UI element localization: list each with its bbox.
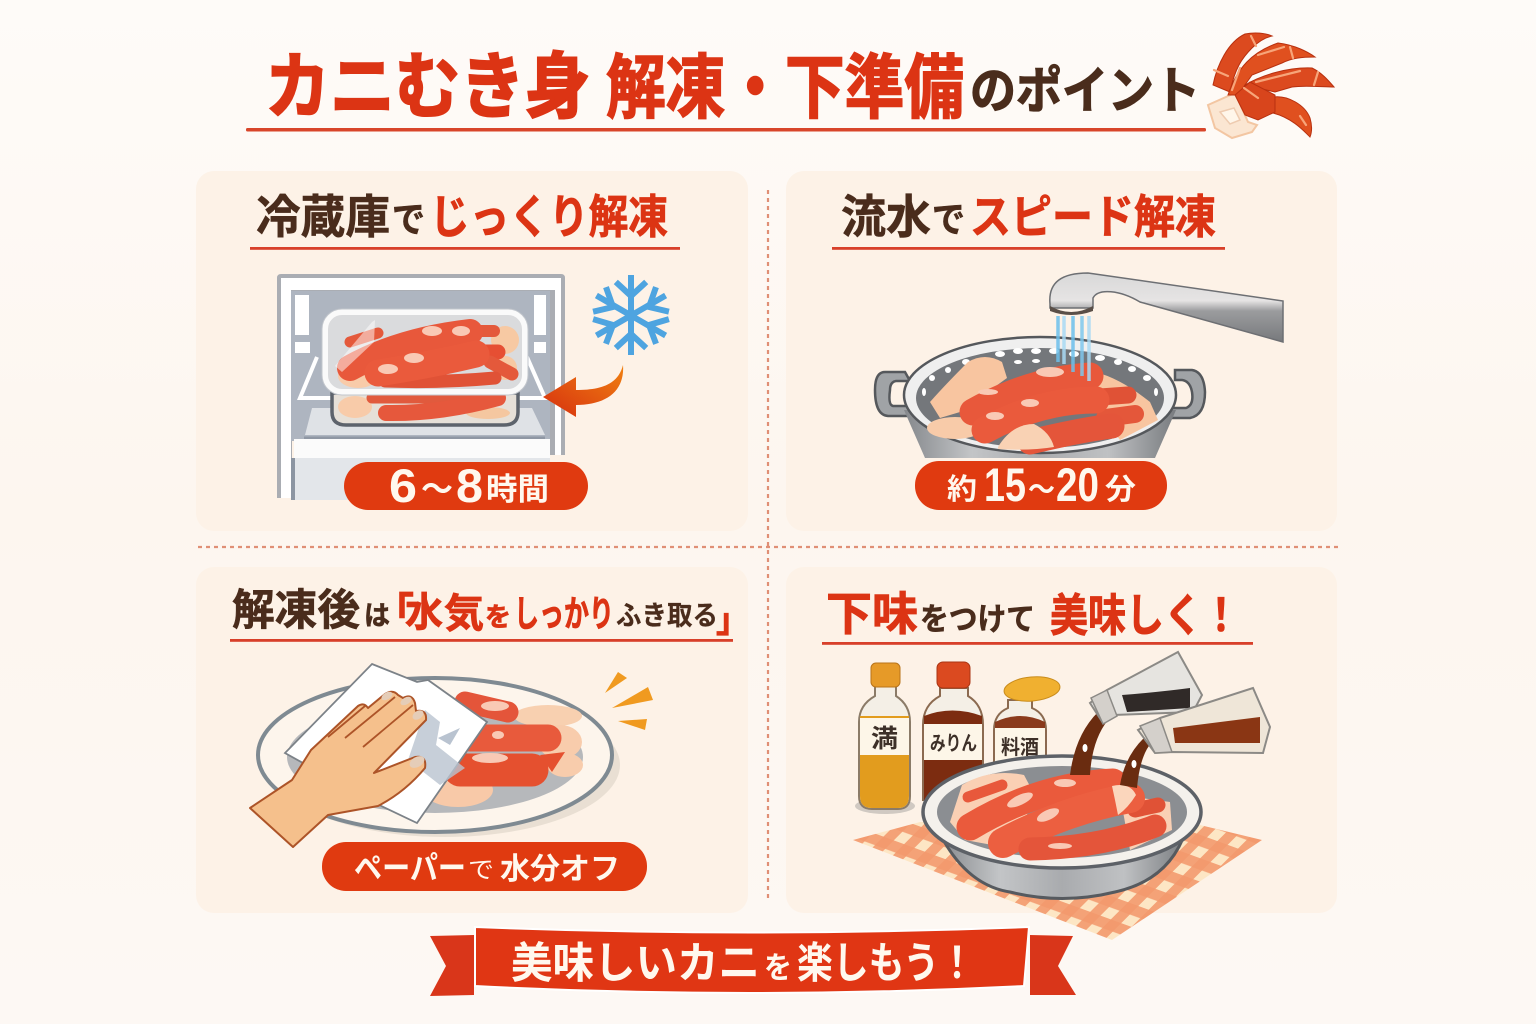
pill: paper removes moisture: で — [468, 857, 494, 884]
illustration: hand — [250, 690, 426, 847]
illustration: water stream — [1058, 316, 1089, 381]
title — [265, 48, 1200, 128]
title: のポイント — [970, 63, 1200, 119]
illustration: mirin bottle: みりん — [930, 732, 977, 755]
pill: paper removes moisture: ペーパー — [354, 850, 466, 886]
heading: wiping off moisture: は — [364, 601, 390, 631]
icon: snowflake — [596, 278, 666, 352]
heading: wiping off moisture: 解凍後 — [232, 587, 360, 635]
heading: wiping off moisture: を — [485, 602, 511, 632]
heading: wiping off moisture: しっかり — [514, 593, 614, 634]
pill: 6 to 8 hours: 8 — [456, 459, 483, 512]
illustration: paper towel — [285, 664, 487, 823]
illustration: oil bottle — [855, 663, 915, 814]
icon: sparkle lines — [605, 672, 653, 730]
panel: running water thawing — [786, 171, 1337, 531]
banner: 楽しもう！ — [797, 940, 975, 988]
heading: running water thawing: スピード解凍 — [970, 191, 1216, 243]
pill: about 15 to 20 minutes: 20 — [1056, 458, 1099, 511]
illustration: pouring soy sauce — [1070, 652, 1202, 775]
illustration: third bottle: 料酒 — [1001, 736, 1039, 759]
heading: wiping off moisture — [230, 587, 750, 642]
pill: about 15 to 20 minutes: 約 — [947, 473, 977, 506]
illustration: third bottle — [994, 675, 1061, 770]
banner: 美味しいカニ — [511, 940, 760, 988]
heading: wiping off moisture: 水 — [405, 591, 443, 635]
heading: running water thawing: で — [932, 199, 965, 240]
illustration: plate with crab sticks — [258, 678, 620, 837]
banner — [430, 927, 1076, 996]
illustration: colander with crab sticks — [875, 337, 1205, 458]
heading: refrigerator thawing — [250, 191, 680, 250]
panel: seasoning — [786, 567, 1337, 913]
illustration: checkered cloth — [853, 822, 1262, 940]
heading: refrigerator thawing: で — [392, 199, 425, 240]
arrow: into fridge — [543, 365, 623, 417]
heading: running water thawing — [832, 191, 1225, 250]
pill: paper removes moisture: 水分オフ — [500, 853, 620, 886]
heading: refrigerator thawing: じっくり解凍 — [430, 191, 668, 243]
heading: wiping off moisture: 気 — [444, 592, 484, 636]
heading: wiping off moisture: 」 — [716, 602, 750, 640]
illustration: pouring sauce — [1120, 688, 1270, 788]
pill: 6 to 8 hours: 〜 — [421, 471, 453, 507]
pill: 6 to 8 hours: 時間 — [486, 472, 549, 507]
divider: vertical — [767, 190, 769, 900]
icon: crab legs — [1208, 33, 1334, 138]
heading: wiping off moisture: ふき取る — [616, 601, 718, 631]
pill: paper removes moisture — [322, 842, 647, 891]
illustration: faucet — [1050, 273, 1283, 342]
illustration: container with crab sticks — [322, 309, 528, 425]
title: カニむき身 — [265, 48, 590, 128]
panel: wiping off moisture — [196, 567, 750, 913]
illustration: pan with crab sticks — [923, 756, 1201, 898]
pill: 6 to 8 hours: 6 — [389, 459, 417, 512]
illustration: mirin bottle — [923, 662, 983, 800]
divider: horizontal — [198, 546, 1340, 548]
illustration: fridge — [277, 274, 565, 500]
pill: 6 to 8 hours — [344, 459, 588, 512]
pill: about 15 to 20 minutes: 15 — [984, 458, 1026, 511]
illustration: oil bottle: 満 — [871, 725, 898, 753]
heading: seasoning — [822, 588, 1253, 645]
heading: running water thawing: 流水 — [841, 191, 931, 243]
heading: seasoning: をつけて — [920, 602, 1035, 637]
pill: about 15 to 20 minutes: 〜 — [1028, 474, 1055, 505]
title: 解凍・下準備 — [606, 49, 964, 127]
heading: seasoning: 美味しく！ — [1050, 590, 1240, 641]
heading: seasoning: 下味 — [826, 588, 918, 640]
panel: refrigerator thawing — [196, 171, 748, 531]
pill: about 15 to 20 minutes — [915, 458, 1167, 511]
pill: about 15 to 20 minutes: 分 — [1105, 473, 1136, 506]
title underline — [246, 128, 1206, 132]
banner: を — [764, 952, 792, 985]
heading: wiping off moisture: 「 — [374, 591, 414, 635]
heading: refrigerator thawing: 冷蔵庫 — [256, 191, 390, 243]
